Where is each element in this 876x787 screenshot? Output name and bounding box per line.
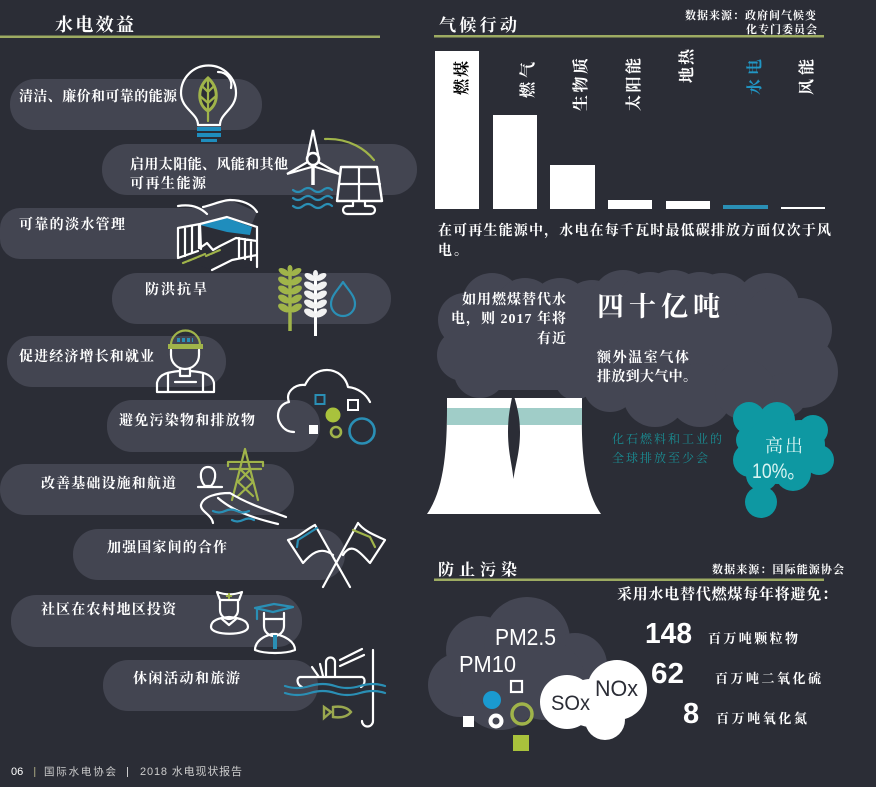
stat: particulates [645,618,798,650]
cloud: particulates [428,597,607,751]
icon: crossed flags [288,523,385,587]
cooling tower [427,392,601,514]
benefit: clean energy [10,79,262,130]
stat: particulates: 百万吨颗粒物 [708,631,798,646]
teal cloud [733,402,834,518]
cloud: particulates: PM10 [459,651,516,677]
benefit: rural communities: 社区在农村地区投资 [41,601,178,618]
bar chart: emissions by source: 太阳能 [624,58,643,111]
source note: 化专门委员会 [746,22,818,36]
panel: greenhouse cloud [427,270,838,518]
benefit: recreation: 休闲活动和旅游 [133,670,240,687]
icon: fishing boat [285,649,385,726]
cloud [437,270,838,427]
callout text [451,291,567,347]
stat: nitrogen oxide: 百万吨氧化氮 [716,711,807,726]
cloud: SOx and NOx: SOx [551,692,590,715]
teal note: 化石燃料和工业的 [612,431,722,446]
benefit: avoid pollutants: 避免污染物和排放物 [119,412,255,429]
benefit: infrastructure [0,464,294,515]
icon: dam [178,200,257,270]
stat: particulates: 148 [645,618,692,650]
benefit: flood and drought: 防洪抗旱 [145,281,207,298]
icon: wheat and water drop [277,265,355,336]
teal note [612,431,722,465]
benefit: cooperation [73,529,345,580]
stat: sulfur dioxide: 百万吨二氧化硫 [715,671,822,686]
callout text: 电，则 2017 年将 [451,310,567,327]
chart caption [438,222,831,259]
footer [11,764,242,778]
heading: climate action: 气候行动 [439,15,517,35]
bar chart: emissions by source: 生物质 [571,58,590,111]
panel: climate action [434,8,831,259]
cloud: SOx and NOx [540,660,647,740]
panel: hydropower benefits [0,15,417,726]
source note: 数据来源：政府间气候变 [685,8,817,22]
bar chart: emissions by source: 风能 [797,59,816,95]
cloud: particulates: PM2.5 [495,624,556,650]
benefit: infrastructure: 改善基础设施和航道 [41,475,176,492]
icon: light bulb with leaf [181,66,236,146]
callout: extra greenhouse gas: 额外温室气体 [596,349,689,366]
callout text: 如用燃煤替代水 [462,291,567,308]
callout: extra greenhouse gas: 排放到大气中。 [597,368,697,385]
footer: 国际水电协会 [44,765,116,778]
footer: 2018 水电现状报告 [140,764,242,778]
benefit: cooperation: 加强国家间的合作 [107,539,227,556]
icon: doctor and graduate [211,592,295,653]
source note [685,8,818,36]
source note: 数据来源：国际能源协会 [712,562,844,576]
teal cloud: 10%。 [752,460,805,483]
chart caption: 电。 [438,242,468,259]
cloud: SOx and NOx: NOx [595,676,638,701]
callout text: 有近 [537,330,567,347]
bar chart: emissions by source: 水电 [746,59,764,95]
stat: nitrogen oxide: 8 [683,698,699,730]
icon: worker [157,330,214,392]
benefit: fresh water [0,208,245,259]
chart caption: 在可再生能源中，水电在每千瓦时最低碳排放方面仅次于风 [438,222,831,239]
stat: sulfur dioxide [651,658,822,690]
benefit: recreation [103,660,318,711]
benefit: avoid pollutants [107,400,320,452]
bar chart: emissions by source: 地热 [677,48,696,83]
benefit: rural communities [11,595,302,647]
bar chart: emissions by source: 燃气 [518,62,537,99]
benefit: renewables [102,144,417,195]
footer: 06 [11,766,23,778]
benefit: renewables: 可再生能源 [130,175,207,192]
heading: hydropower benefits: 水电效益 [55,15,134,35]
benefit: clean energy: 清洁、廉价和可靠的能源 [19,88,178,105]
benefit: renewables: 启用太阳能、风能和其他 [130,156,288,173]
big number: four billion tons: 四十亿吨 [597,292,720,322]
benefit: economic growth [7,336,226,387]
bar chart: emissions by source [435,48,825,209]
icon: power tower and river [198,449,286,524]
stat: nitrogen oxide [683,698,807,730]
icon: pollution cloud [278,370,374,444]
bar chart: emissions by source: 燃煤 [452,61,471,96]
panel: preventing pollution [428,560,844,751]
benefit: flood and drought [112,273,391,324]
stat: sulfur dioxide: 62 [651,658,684,690]
benefit: fresh water: 可靠的淡水管理 [19,216,125,233]
benefit: economic growth: 促进经济增长和就业 [19,348,154,365]
teal cloud: 高出 [765,436,803,456]
subheading: 采用水电替代燃煤每年将避免： [617,585,837,603]
icon: wind turbine and solar panel [287,130,382,214]
teal note: 全球排放至少会 [612,450,708,465]
heading: preventing pollution: 防止污染 [438,560,517,579]
callout: extra greenhouse gas [596,349,697,385]
